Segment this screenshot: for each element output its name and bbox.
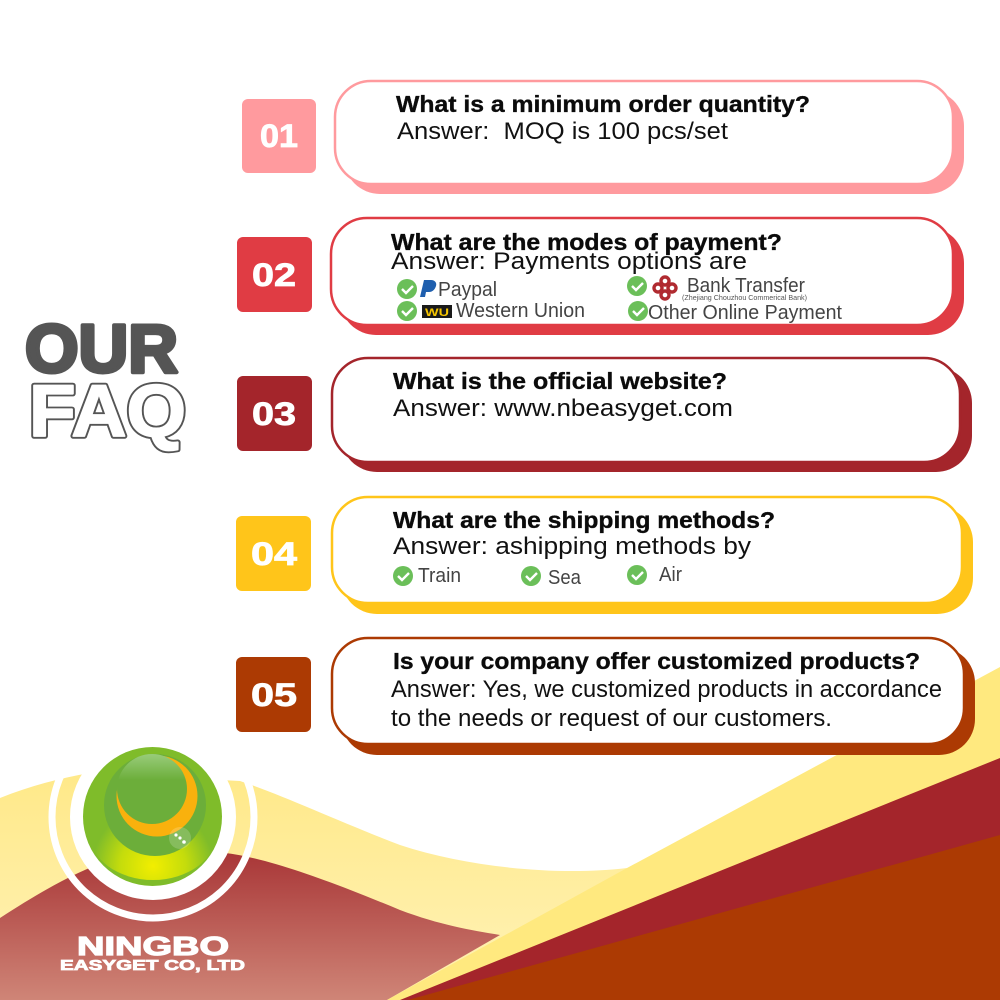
option: western union [397,300,585,322]
logo text: NINGBO [77,931,229,961]
question and answer 5: Answer: Yes, we customized products in accordance [391,676,942,703]
question and answer 3 [393,368,733,422]
heading: our faq [25,311,186,452]
faq item 2 [237,218,964,335]
option: bank transfer: (Zhejiang Chouzhou Commerical Bank) [682,293,807,302]
badge 02: 02 [252,257,296,293]
heading: our faq: FAQ [29,371,186,452]
faq item 5 [236,638,975,755]
card 2 [331,218,964,335]
faq item 4 [236,497,973,614]
badge 02 [237,237,312,312]
question and answer 1 [396,91,810,145]
option: bank transfer [627,275,807,302]
background: orange diagonal band [408,835,1000,1000]
logo: ningbo easyget sphere [52,716,254,918]
option: other online payment: Other Online Payment [648,302,842,324]
faq item 3 [237,358,972,472]
logo text: EASYGET CO, LTD [60,957,245,974]
option: bank transfer: Bank Transfer [687,275,805,297]
card 5 [332,638,975,755]
badge 03: 03 [252,396,296,432]
question and answer 2 [391,229,782,275]
badge 03 [237,376,312,451]
badge 01 [242,99,316,173]
question and answer 2: What are the modes of payment? [391,229,782,255]
question and answer 3: What is the official website? [393,368,727,394]
option: air [627,564,682,586]
badge 05: 05 [251,677,297,713]
question and answer 4: What are the shipping methods? [393,507,775,533]
question and answer 3: Answer: www.nbeasyget.com [393,395,733,422]
background: crimson diagonal band [400,758,1000,1000]
background: red wave [0,853,500,1000]
option: air: Air [659,564,682,586]
question and answer 2: Answer: Payments options are [391,248,747,275]
option: paypal [397,279,497,301]
logo text [60,931,245,974]
question and answer 4: Answer: ashipping methods by [393,533,751,560]
option: train: Train [418,565,461,587]
background: yellow wave [0,773,627,1000]
option: western union: WU [425,307,449,319]
option: train [393,565,461,587]
option: western union: Western Union [456,300,585,322]
question and answer 1: What is a minimum order quantity? [396,91,810,117]
background: yellow diagonal band [387,667,1000,1000]
faq item 1 [242,81,964,194]
option: sea [521,566,582,589]
question and answer 1: Answer: MOQ is 100 pcs/set [397,118,728,145]
heading: our faq: OUR [25,311,178,387]
question and answer 5: Is your company offer customized products? [393,648,920,674]
card 4 [332,497,973,614]
badge 04: 04 [251,536,297,572]
question and answer 5: to the needs or request of our customers. [391,705,832,732]
option: sea: Sea [548,567,582,589]
heading: our faq: FAQ [29,371,186,452]
badge 04 [236,516,311,591]
option: paypal: Paypal [438,279,497,301]
question and answer 4 [393,507,775,560]
badge 01: 01 [260,118,298,154]
card 1 [335,81,964,194]
question and answer 5 [391,648,942,732]
card 3 [332,358,972,472]
badge 05 [236,657,311,732]
